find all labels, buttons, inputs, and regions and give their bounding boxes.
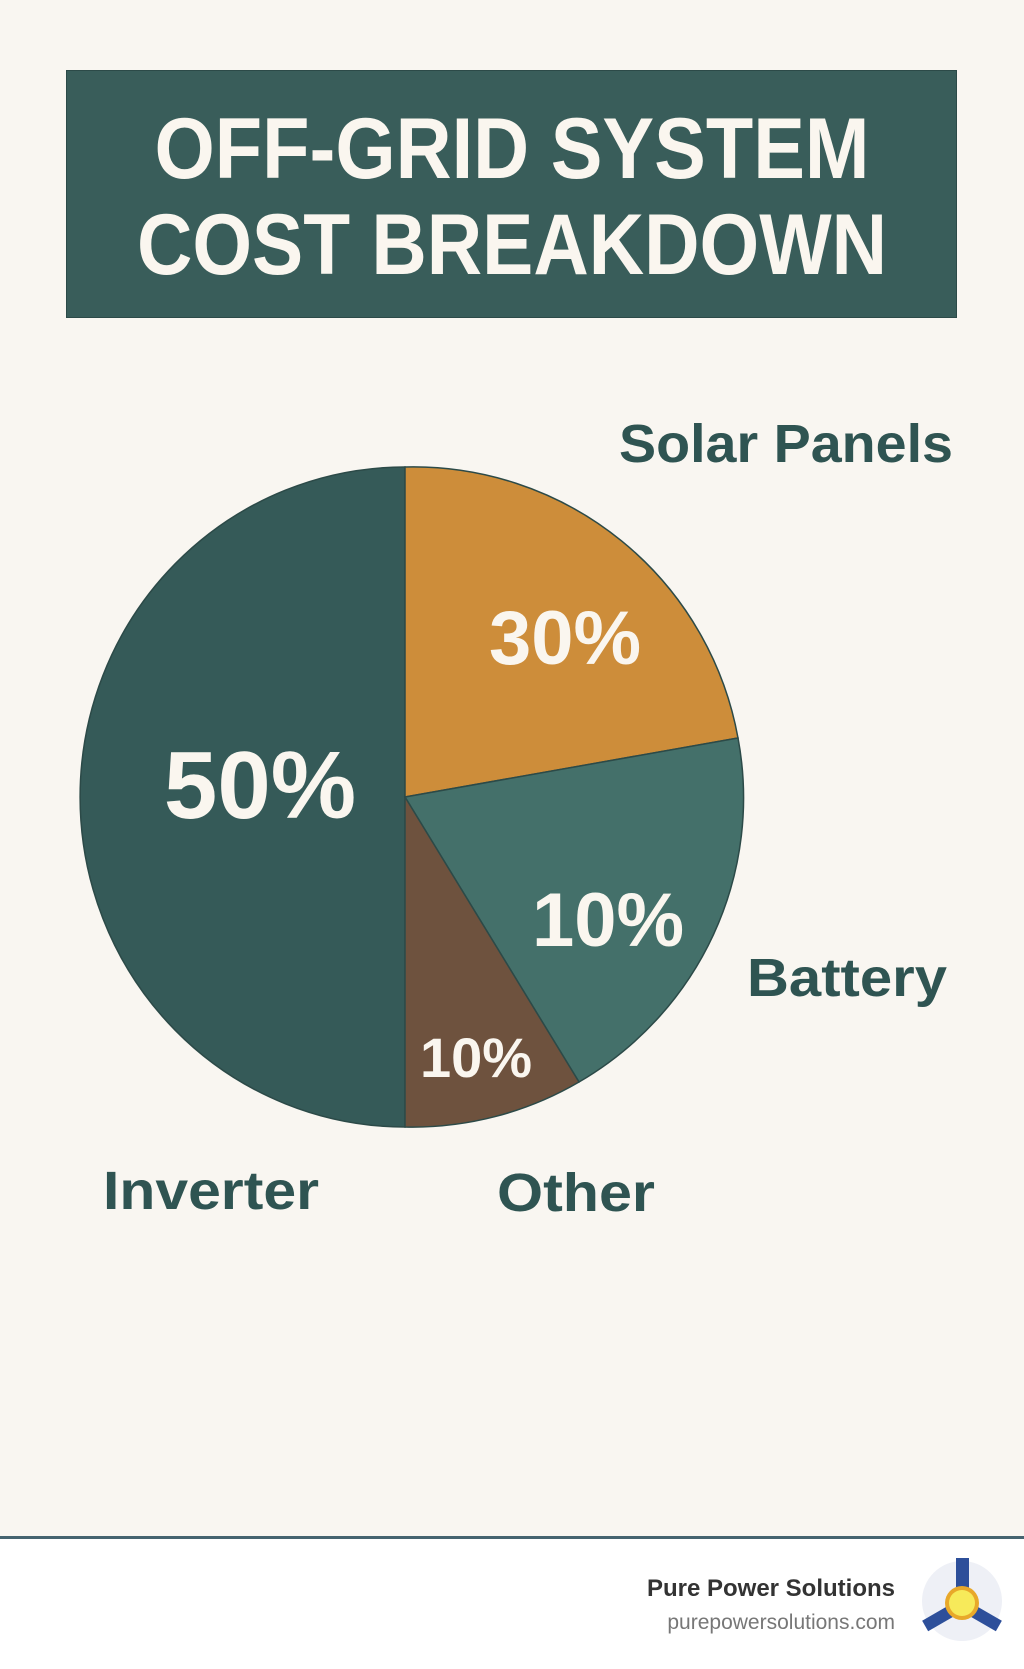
title: COST BREAKDOWN [137, 197, 887, 293]
category labels [103, 414, 953, 1223]
title: OFF-GRID SYSTEM [154, 101, 870, 197]
slice: inverter 50% [80, 467, 405, 1127]
footer url: purepowersolutions.com [667, 1611, 895, 1634]
category labels: Battery [747, 948, 947, 1008]
slice: battery 10% [405, 738, 744, 1082]
category labels: Inverter [103, 1161, 319, 1221]
percent labels: 10% [532, 878, 684, 963]
percent labels: 30% [489, 596, 641, 681]
percent labels: 50% [164, 732, 356, 839]
pie chart [79, 414, 953, 1223]
footer company name: Pure Power Solutions [647, 1575, 895, 1602]
title [66, 70, 957, 318]
icon: logo [922, 1558, 1002, 1641]
footer [0, 1536, 1024, 1669]
category labels: Solar Panels [619, 414, 953, 474]
percent labels [164, 596, 684, 1089]
percent labels: 10% [420, 1026, 532, 1089]
slice: solar panels 30% [405, 467, 738, 797]
category labels: Other [497, 1163, 655, 1223]
slice: other 10% [405, 797, 579, 1127]
